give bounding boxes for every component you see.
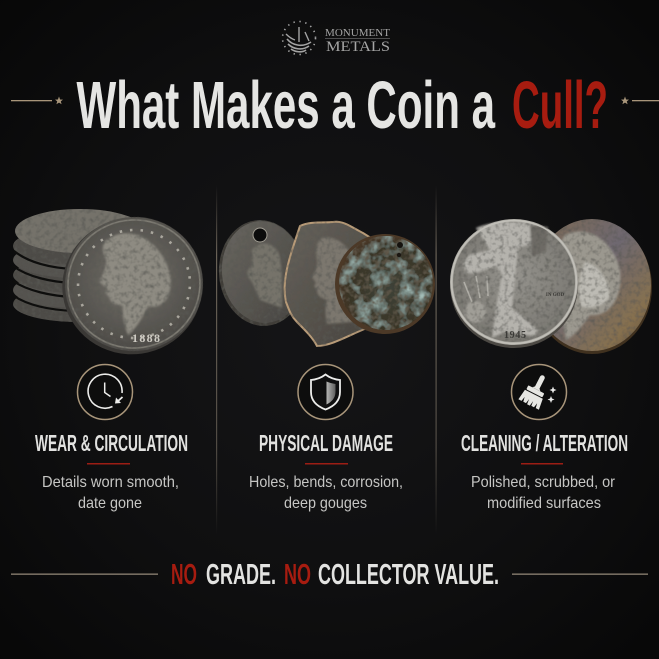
bottom statement <box>171 559 499 591</box>
icon: clock with arrow <box>78 364 132 420</box>
motto: IN GOD <box>546 293 564 298</box>
bottom statement: NO <box>171 559 197 591</box>
bottom line left <box>11 574 158 575</box>
description: damage <box>249 474 403 512</box>
description: damage: deep gouges <box>284 495 367 512</box>
date 1945: 1945 <box>504 330 526 341</box>
description: cleaning: Polished, scrubbed, or <box>471 474 616 491</box>
description: wear: Details worn smooth, <box>42 474 179 491</box>
Walking Liberty coin 1945 <box>450 219 578 348</box>
bottom statement: COLLECTOR VALUE. <box>318 559 499 591</box>
date 1888: 1888 <box>132 331 160 345</box>
heading: wear: WEAR & CIRCULATION <box>35 430 188 456</box>
logo: Monument Metals <box>282 22 390 55</box>
panel: wear and circulation text <box>35 430 188 512</box>
description: cleaning <box>471 474 616 512</box>
panel: physical damage text <box>249 430 403 512</box>
coins: cleaned pair <box>450 219 652 354</box>
logo wordmark: METALS <box>326 39 390 55</box>
description: cleaning: modified surfaces <box>487 495 601 512</box>
bottom line right <box>512 574 648 575</box>
coins: damaged trio <box>214 216 435 346</box>
icon: brush with sparkles <box>512 364 566 420</box>
logo emblem <box>282 22 316 54</box>
bottom statement: GRADE. <box>206 559 276 591</box>
logo wordmark <box>325 28 390 55</box>
coins: worn stack <box>13 208 212 363</box>
bent coin <box>284 222 379 346</box>
title ornament right <box>621 96 659 104</box>
icon: shield <box>298 364 353 420</box>
description: wear <box>42 474 179 512</box>
description: wear: date gone <box>78 495 142 512</box>
bottom statement: NO <box>284 559 311 591</box>
panel: cleaning and alteration text <box>461 430 628 512</box>
title ornament left <box>11 96 63 104</box>
logo wordmark: MONUMENT <box>325 28 390 39</box>
front Morgan coin 1888 <box>53 208 212 363</box>
corroded coin <box>335 234 435 334</box>
heading: damage: PHYSICAL DAMAGE <box>259 430 393 456</box>
description: damage: Holes, bends, corrosion, <box>249 474 403 491</box>
stacked coins <box>13 209 145 322</box>
coin with hole <box>214 216 310 330</box>
toned Morgan coin <box>552 219 652 354</box>
